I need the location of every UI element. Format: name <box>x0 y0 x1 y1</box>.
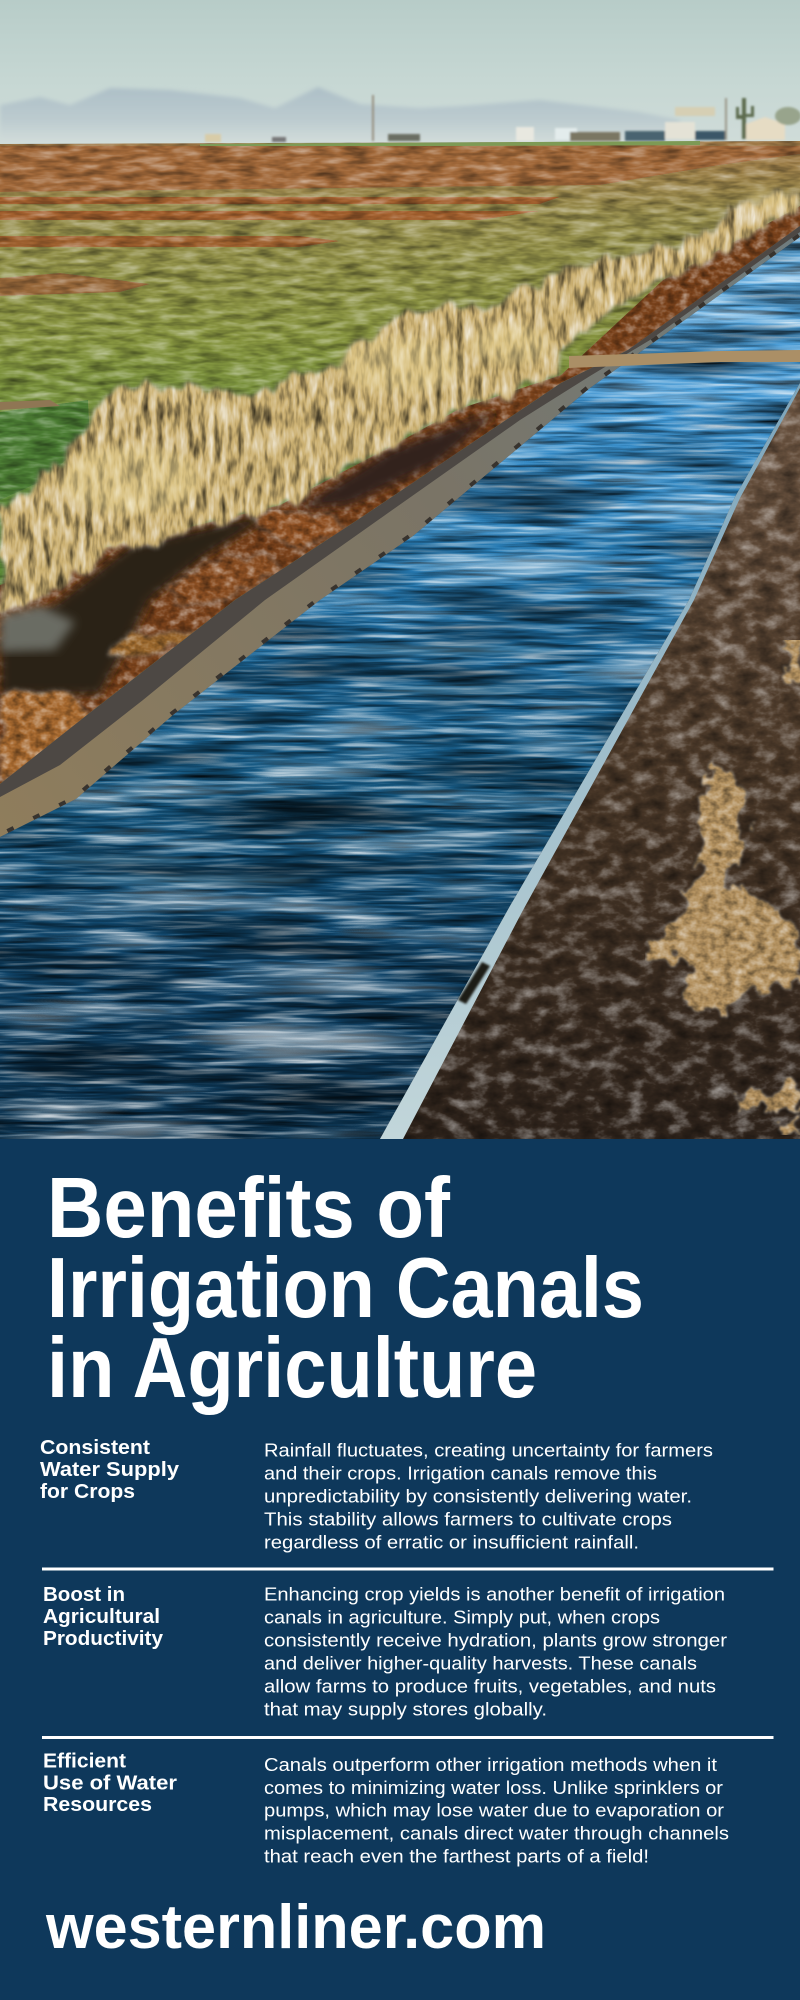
heading: consistent water supply <box>40 1436 180 1503</box>
heading: boost in agricultural productivity: Boost in <box>43 1583 125 1606</box>
section: agricultural productivity <box>43 1583 727 1720</box>
lip top dark strip <box>0 226 800 797</box>
navy content panel <box>0 1139 800 2000</box>
heading: boost in agricultural productivity: Agricultural <box>43 1605 160 1628</box>
dry grass band <box>0 188 800 615</box>
title: in Agriculture <box>47 1321 537 1416</box>
heading: boost in agricultural productivity <box>43 1583 164 1650</box>
concrete edge strip <box>380 383 800 1139</box>
heading: consistent water supply: Water Supply <box>40 1458 180 1481</box>
body text: efficient use of water: that reach even the farthest parts of a field! <box>264 1846 649 1866</box>
right bank soil <box>380 383 800 1139</box>
body text: consistent water supply: Rainfall fluctuates, creating uncertainty for farmers <box>264 1440 713 1460</box>
title <box>47 1161 644 1416</box>
section: consistent water supply <box>40 1436 713 1552</box>
body text: agricultural productivity: consistently receive hydration, plants grow stronger <box>264 1630 727 1650</box>
section: efficient use of water <box>43 1750 729 1866</box>
farm field <box>0 141 800 800</box>
soil mounds in sun <box>0 510 357 782</box>
body text: consistent water supply: This stability allows farmers to cultivate crops <box>264 1508 672 1530</box>
dark debris on concrete edge <box>458 962 490 1004</box>
horizon buildings and machinery <box>205 95 800 142</box>
ploughed brown rows <box>0 146 800 296</box>
heading: efficient use of water resources: Efficient <box>43 1750 126 1772</box>
body text: consistent water supply: and their crops. Irrigation canals remove this <box>264 1462 657 1484</box>
lip notches <box>0 237 800 837</box>
heading: consistent water supply: Consistent <box>40 1436 150 1459</box>
sunlit grass highlight tufts <box>60 192 795 514</box>
body text: agricultural productivity <box>264 1584 727 1720</box>
water highlights <box>40 645 560 885</box>
green horizon strip <box>200 141 700 147</box>
heading: efficient use of water resources <box>43 1750 177 1816</box>
sunlit patches on bank <box>645 640 800 1135</box>
body text: agricultural productivity: that may supply stores globally. <box>264 1698 547 1720</box>
body text: efficient use of water: comes to minimizing water loss. Unlike sprinklers or <box>264 1777 723 1798</box>
heading: boost in agricultural productivity: Productivity <box>43 1627 164 1650</box>
body text: consistent water supply: unpredictability by consistently delivering water. <box>264 1486 692 1506</box>
grey runoff patch <box>0 605 75 652</box>
darker green patch bottom left <box>0 400 90 500</box>
body text: consistent water supply <box>264 1440 713 1552</box>
body text: agricultural productivity: allow farms to produce fruits, vegetables, and nuts <box>264 1676 716 1696</box>
body text: efficient use of water <box>264 1754 729 1866</box>
title: Benefits of <box>47 1161 451 1256</box>
heading: efficient use of water resources: Use of Water <box>43 1772 177 1794</box>
heading: efficient use of water resources: Resources <box>43 1793 152 1816</box>
divider <box>42 1736 774 1739</box>
body text: agricultural productivity: canals in agriculture. Simply put, when crops <box>264 1606 660 1628</box>
body text: efficient use of water: Canals outperform other irrigation methods when it <box>264 1754 717 1775</box>
wooden plank across canal <box>569 350 800 368</box>
body text: consistent water supply: regardless of erratic or insufficient rainfall. <box>264 1532 639 1552</box>
body text: efficient use of water: pumps, which may lose water due to evaporation or <box>264 1800 724 1820</box>
dirt bank behind concrete lip <box>0 206 800 784</box>
body text: agricultural productivity: and deliver higher-quality harvests. These canals <box>264 1652 697 1674</box>
distant mountains <box>0 87 680 142</box>
heading: consistent water supply: for Crops <box>40 1480 135 1503</box>
water channel <box>0 237 800 1139</box>
shadow under dry grass <box>0 410 500 695</box>
body text: agricultural productivity: Enhancing crop yields is another benefit of irrigation <box>264 1584 725 1604</box>
footer website: westernliner.com <box>45 1893 546 1962</box>
title: Irrigation Canals <box>47 1241 644 1336</box>
body text: efficient use of water: misplacement, canals direct water through channels <box>264 1822 729 1844</box>
concrete lip of canal <box>0 226 800 837</box>
photo: irrigation canal through farmland <box>0 0 800 1139</box>
sky <box>0 0 800 146</box>
divider <box>42 1568 774 1570</box>
